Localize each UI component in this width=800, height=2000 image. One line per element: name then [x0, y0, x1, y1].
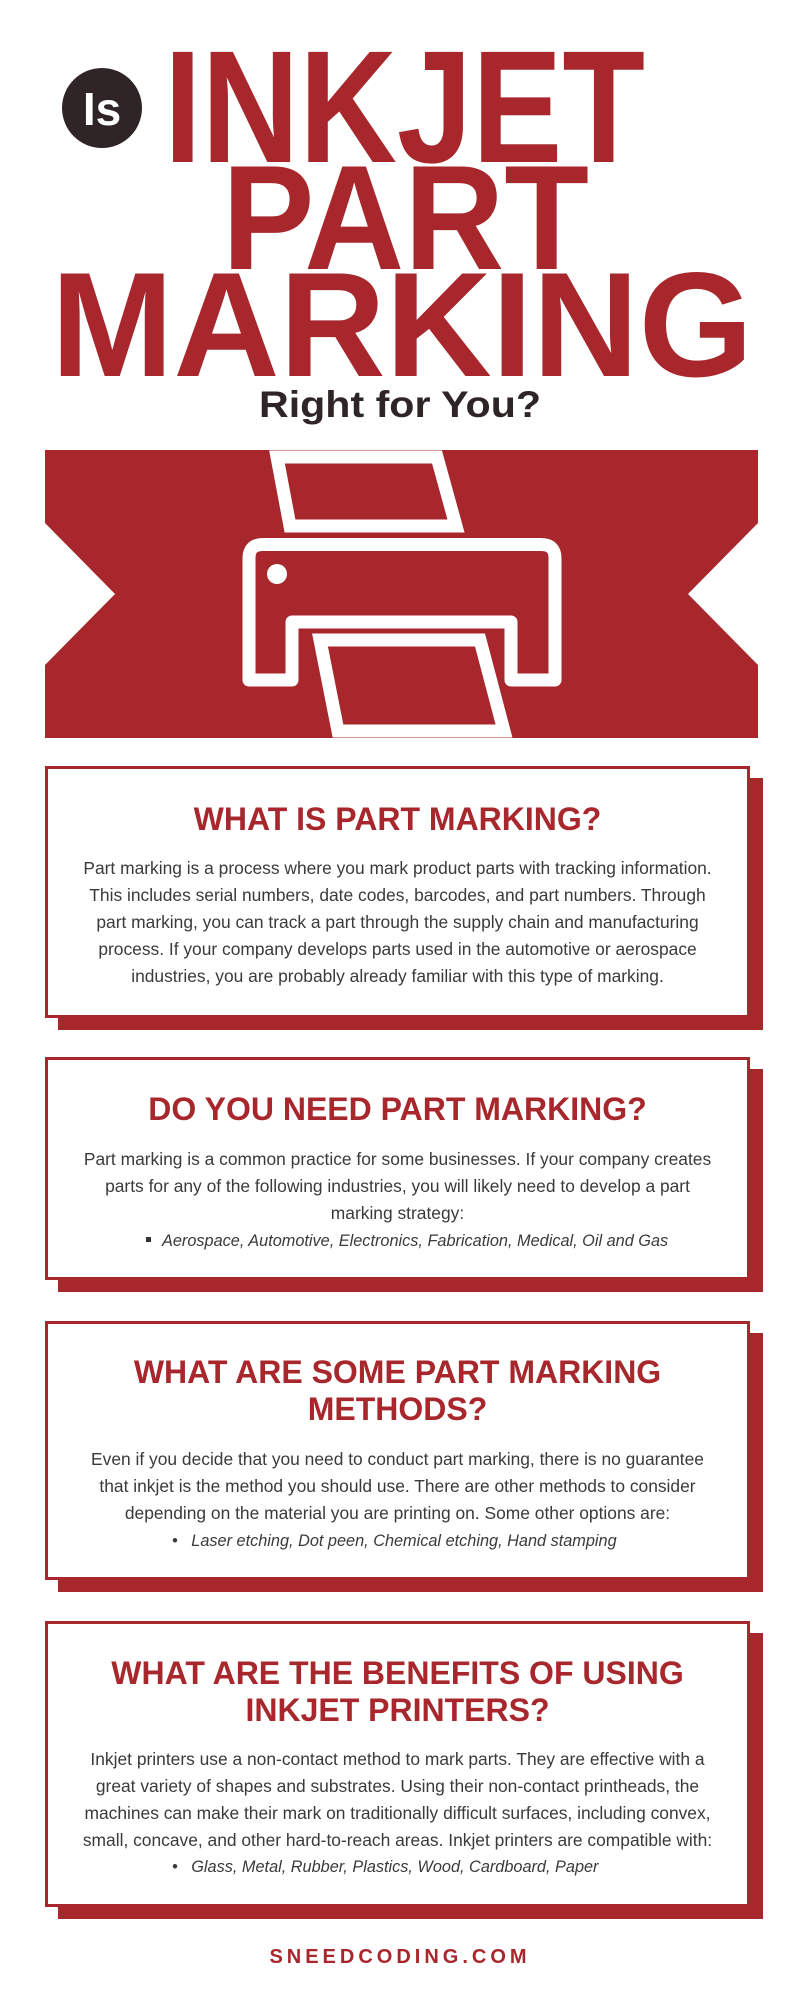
heading: benefits: INKJET PRINTERS?	[245, 1692, 550, 1728]
bullet: materials: • Glass, Metal, Rubber, Plastics, Wood, Cardboard, Paper	[172, 1858, 598, 1876]
bullet: methods list: • Laser etching, Dot peen, Chemical etching, Hand stamping	[172, 1532, 617, 1550]
banner with printer icon	[45, 450, 758, 738]
panel: what is part marking	[45, 766, 750, 1018]
title block	[51, 17, 753, 425]
panel: benefits of inkjet	[45, 1621, 750, 1907]
text: part marking definition: part marking, you can track a part through the supply chain and manufacturing	[96, 912, 699, 932]
bullet: industries: Aerospace, Automotive, Electronics, Fabrication, Medical, Oil and Gas	[162, 1232, 668, 1250]
heading: benefits: WHAT ARE THE BENEFITS OF USING	[111, 1655, 684, 1691]
footer: SNEEDCODING.COM	[269, 1946, 531, 1968]
title line PART: PART	[222, 134, 589, 301]
heading: benefits	[111, 1655, 684, 1728]
text: benefits: small, concave, and other hard-to-reach areas. Inkjet printers are compatible with:	[83, 1830, 712, 1850]
heading: methods: METHODS?	[308, 1391, 487, 1427]
heading: what is part marking: WHAT IS PART MARKING?	[194, 801, 601, 837]
badge: Is	[62, 68, 142, 148]
subtitle: Right for You?	[259, 384, 541, 425]
text: benefits	[83, 1749, 712, 1850]
text: part marking definition: process. If your company develops parts used in the automotive or aerospace	[98, 939, 697, 959]
text: methods: Even if you decide that you need to conduct part marking, there is no guarantee	[91, 1449, 704, 1469]
text: need part marking: marking strategy:	[331, 1203, 464, 1223]
text: methods	[91, 1449, 704, 1523]
title line MARKING: MARKING	[51, 241, 753, 408]
heading: do you need part marking: DO YOU NEED PART MARKING?	[148, 1091, 647, 1127]
title line INKJET: INKJET	[164, 17, 645, 196]
text: part marking definition: Part marking is a process where you mark product parts with tracking information.	[83, 858, 712, 878]
icon: printer	[249, 457, 555, 731]
heading: methods	[134, 1354, 661, 1427]
text: benefits: machines can make their mark on traditionally difficult surfaces, including convex,	[84, 1803, 711, 1823]
text: part marking definition	[83, 858, 712, 986]
heading: methods: WHAT ARE SOME PART MARKING	[134, 1354, 661, 1390]
text: need part marking: Part marking is a common practice for some businesses. If your company creates	[84, 1149, 711, 1169]
panel: part marking methods	[45, 1321, 750, 1580]
text: need part marking: parts for any of the following industries, you will likely need to develop a part	[105, 1176, 690, 1196]
text: benefits: Inkjet printers use a non-contact method to mark parts. They are effective with a	[90, 1749, 705, 1769]
badge: Is: Is	[83, 83, 121, 135]
text: methods: that inkjet is the method you should use. There are other methods to consider	[99, 1476, 696, 1496]
text: benefits: great variety of shapes and substrates. Using their non-contact printheads, the	[96, 1776, 699, 1796]
text: methods: depending on the material you are printing on. Some other options are:	[125, 1503, 670, 1523]
text: part marking definition: industries, you are probably already familiar with this type of marking.	[131, 966, 664, 986]
text: need part marking	[84, 1149, 711, 1223]
text: part marking definition: This includes serial numbers, date codes, barcodes, and part numbers. Through	[89, 885, 706, 905]
panel: do you need part marking	[45, 1057, 750, 1280]
